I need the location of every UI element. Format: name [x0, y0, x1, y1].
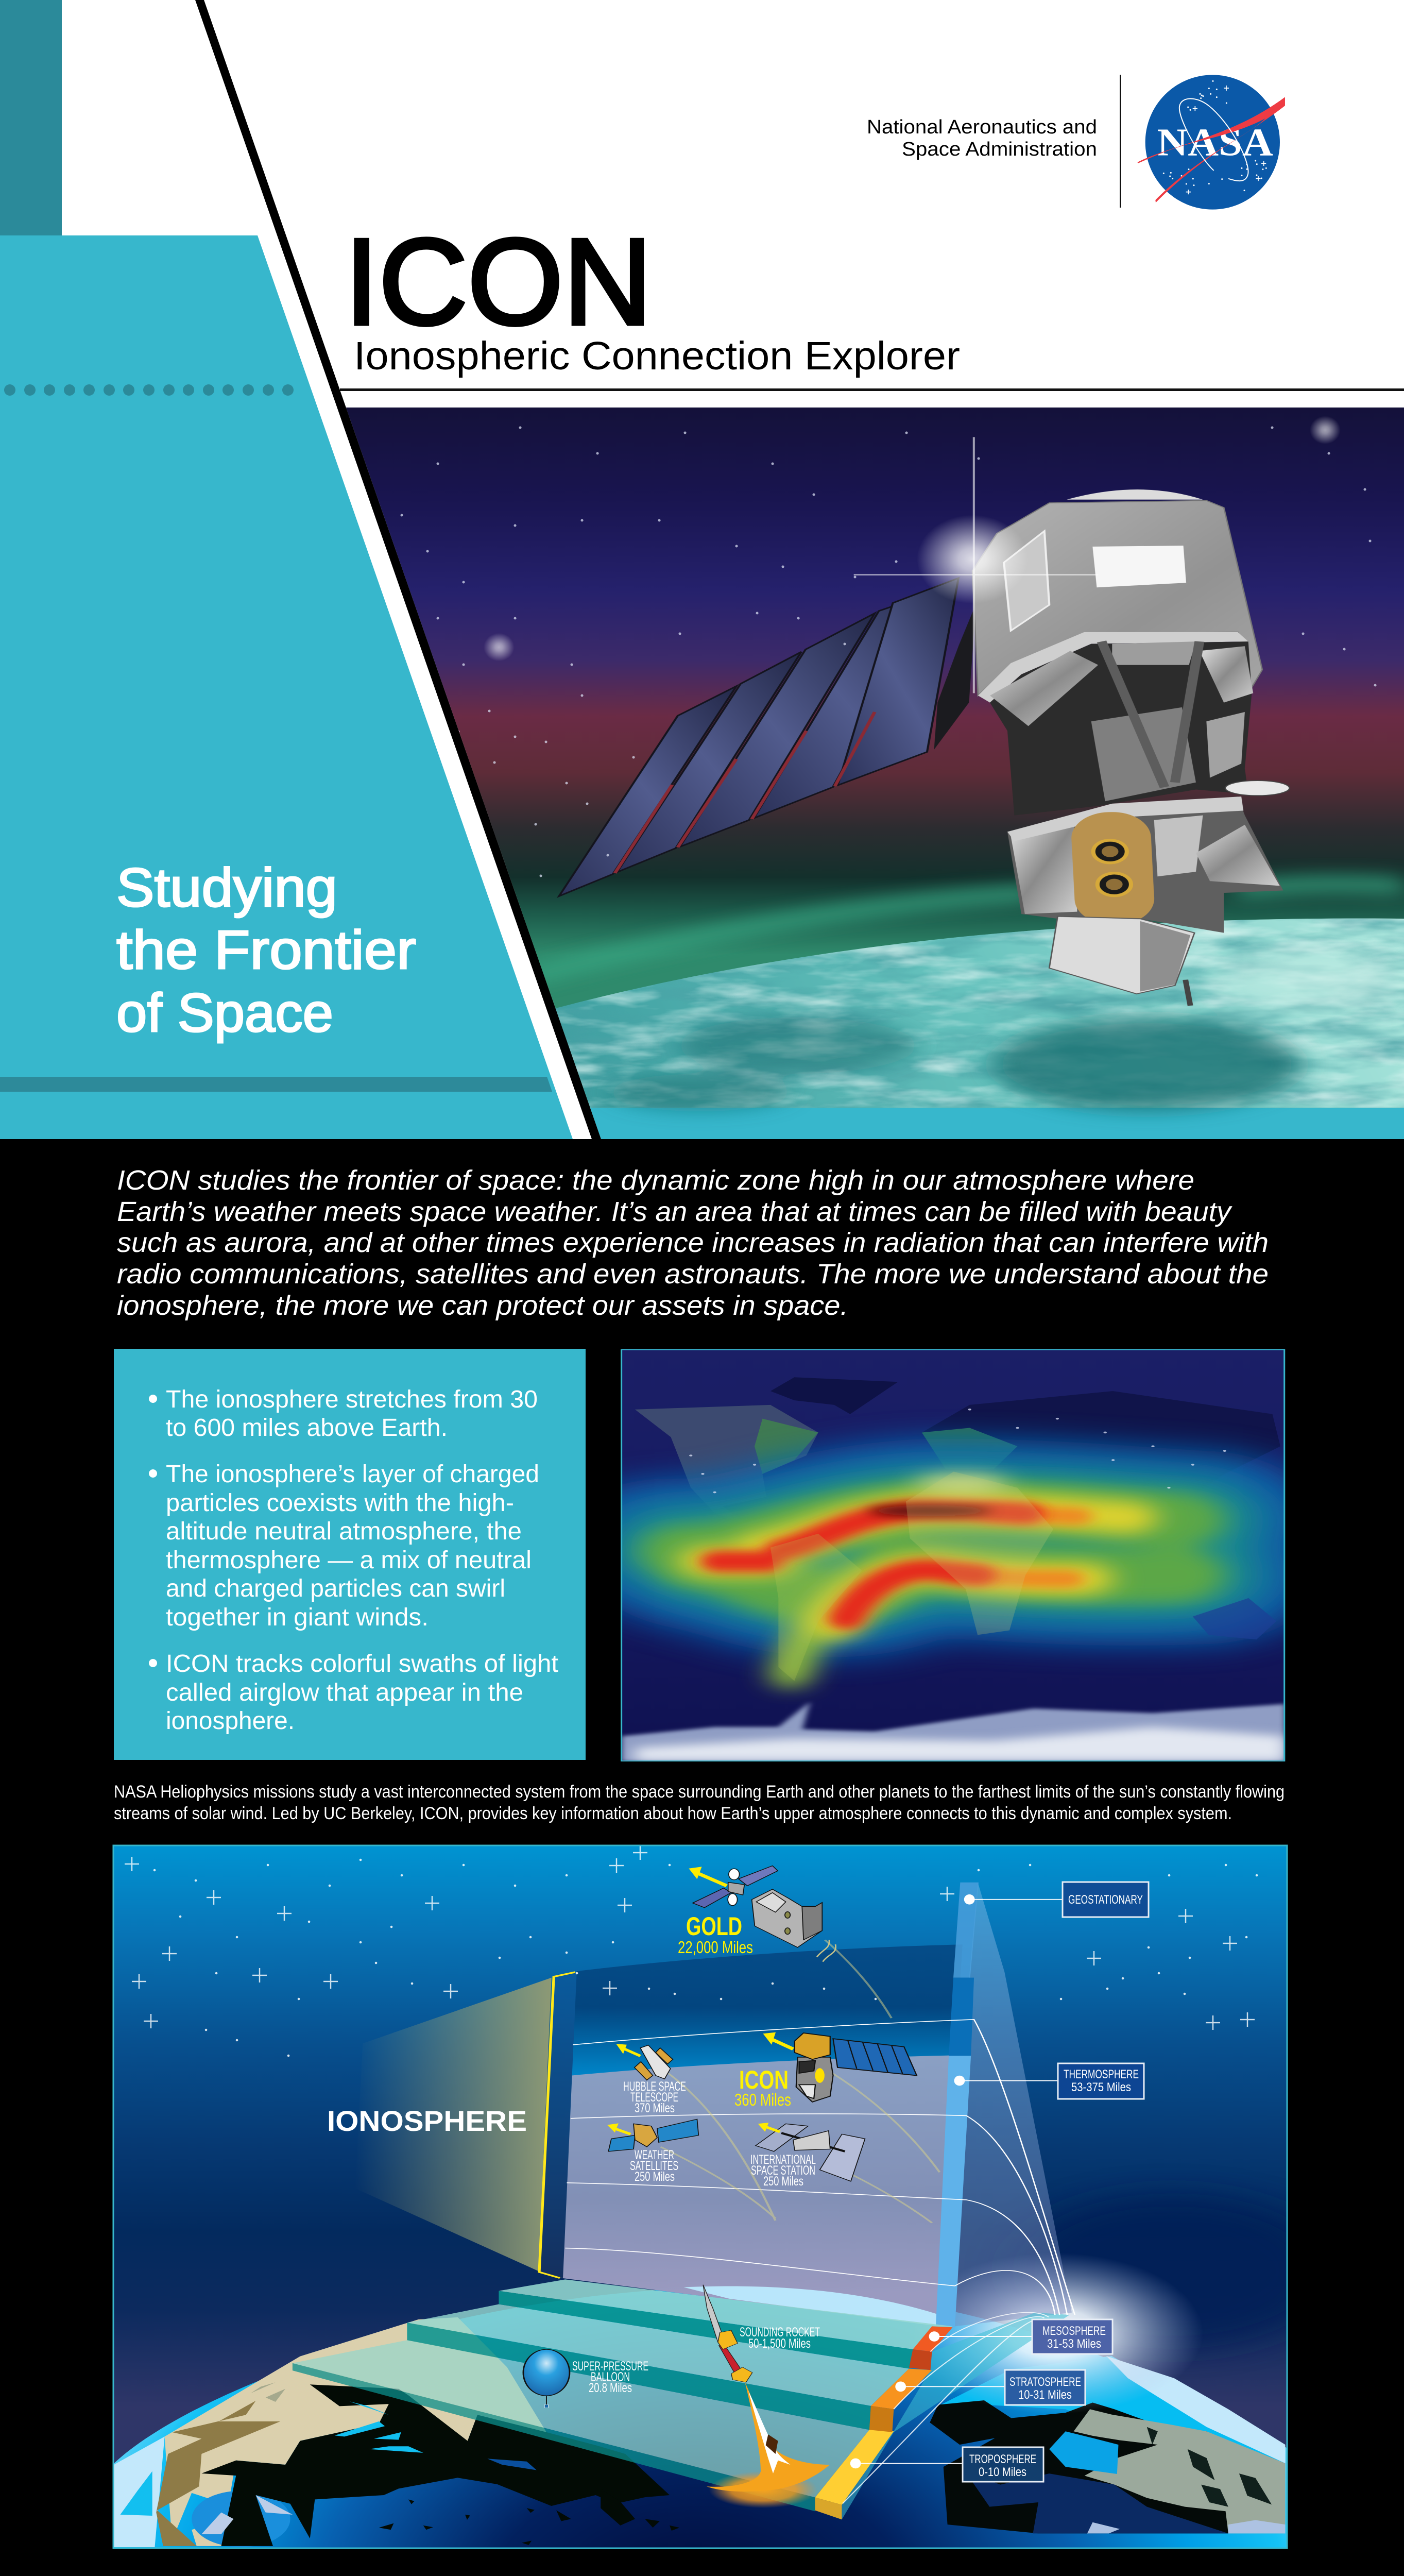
ice edge: [114, 2436, 165, 2547]
heliophysics note: streams of solar wind. Led by UC Berkeley, ICON, provides key information about how Earth’s upper atmosphere connects to this dynamic and complex system.: [114, 1804, 1232, 1823]
intro paragraph: such as aurora, and at other times experience increases in radiation that can interfere with: [117, 1227, 1269, 1258]
panel heading: Studying the Frontier of Space: the Frontier: [116, 920, 416, 980]
layer dots: [850, 1894, 975, 2468]
label: balloon: 20.8 Miles: [589, 2381, 632, 2395]
blue altitude column: [953, 1883, 979, 1978]
layer 2 edge: [407, 2323, 871, 2430]
intro paragraph: ionosphere, the more we can protect our assets in space.: [117, 1290, 848, 1321]
diagram border: [113, 1845, 1287, 2548]
rule under title: [340, 388, 1404, 391]
cyan lakes: [335, 2401, 423, 2453]
earth: [539, 919, 1404, 1108]
layer 1 surface: [499, 2279, 953, 2349]
label: GOLD: 22,000 Miles: [678, 1938, 753, 1957]
label: ISS: [750, 2153, 816, 2189]
label: ICON: 360 Miles: [734, 2090, 791, 2109]
callout: stratosphere: STRATOSPHERE: [1009, 2375, 1081, 2389]
weather satellite: [608, 2119, 698, 2151]
wall lower: [561, 2055, 971, 2326]
dark band on panel: [0, 1077, 552, 1092]
panel: ionosphere bullet points: particles coexists with the high-: [166, 1489, 514, 1517]
map ocean: [622, 1349, 1285, 1761]
dark teal corner bar: [0, 0, 62, 235]
body lower rim: [978, 632, 1248, 703]
dotted row on panel: [4, 384, 294, 396]
super-pressure balloon: [523, 2349, 570, 2408]
subtitle: Ionospheric Connection Explorer: [354, 334, 960, 378]
callout: thermosphere: [1058, 2063, 1144, 2099]
wall side strip: [539, 1972, 577, 2278]
callout leaders: [855, 1900, 1063, 2463]
callout: troposphere: TROPOSPHERE: [969, 2452, 1036, 2466]
distant stars glow: [1310, 416, 1341, 444]
ionosphere cone: [355, 1978, 552, 2271]
wall upper: [569, 1944, 963, 2078]
panel heading: Studying the Frontier of Space: Studying: [116, 857, 337, 918]
callout: stratosphere: [1005, 2370, 1085, 2405]
right continents: [930, 2356, 1285, 2533]
small stars: [155, 1860, 1257, 2056]
blue bay in land: [487, 2459, 537, 2470]
heliophysics note: [114, 1782, 1285, 1823]
callout: geostationary: GEOSTATIONARY: [1068, 1893, 1143, 1907]
cyan coast: [120, 2471, 152, 2516]
label: Hubble: TELESCOPE: [630, 2090, 678, 2105]
header divider: [1120, 75, 1121, 208]
array hinge seams: [615, 712, 875, 873]
panel: ionosphere bullet points: The ionosphere’s layer of charged: [166, 1461, 539, 1488]
hero panel: ICON spacecraft above Earth: [346, 407, 1404, 1139]
label: weather satellites: [630, 2148, 678, 2184]
blue inlet: [192, 2491, 290, 2547]
layer 3 edge: [293, 2363, 815, 2511]
north america: [635, 1405, 818, 1524]
label: sounding rocket: 50-1,500 Miles: [748, 2336, 811, 2351]
header white area: [0, 0, 1404, 1139]
diagram sky: [113, 1845, 1287, 2548]
label: ICON: [734, 2065, 791, 2109]
diagonal black rule: [195, 0, 601, 1139]
layer 2 surface: [407, 2304, 909, 2406]
stratosphere block: [871, 2369, 932, 2409]
panel: ionosphere bullet points: to 600 miles above Earth.: [166, 1414, 448, 1442]
horizon glow: [905, 2253, 1203, 2414]
scattered islands: [379, 2488, 679, 2545]
label: weather satellites: SATELLITES: [630, 2159, 678, 2173]
blue bay: [1049, 2431, 1118, 2474]
white radiator: [1092, 546, 1186, 587]
atmosphere layers diagram: [113, 1845, 1333, 2548]
cyan title panel: [0, 235, 573, 1139]
green glow: [687, 1508, 1177, 1597]
africa: [906, 1471, 1053, 1635]
pale patch: [251, 2382, 285, 2402]
star flare: [917, 515, 1029, 604]
cyan strip under image: [590, 1108, 1404, 1139]
agency name: National Aeronautics and: [867, 116, 1097, 138]
earth globe: [113, 2287, 1287, 2548]
callout: troposphere: 0-10 Miles: [979, 2465, 1026, 2479]
layer 1 edge: [499, 2291, 913, 2369]
map border: [622, 1350, 1285, 1761]
panel: ionosphere bullet points: altitude neutral atmosphere, the: [166, 1518, 522, 1545]
ICON arrow: [769, 2038, 793, 2049]
sounding rocket: [703, 2285, 830, 2508]
peak intensity: [868, 1505, 992, 1516]
cyan ocean: [940, 2356, 1285, 2511]
panel heading: Studying the Frontier of Space: of Space: [116, 982, 333, 1043]
weather satellite arrow: [614, 2128, 630, 2134]
panel: ionosphere bullet points: thermosphere — a mix of neutral: [166, 1547, 532, 1574]
label: balloon: BALLOON: [591, 2370, 630, 2384]
grey land: [1074, 2409, 1285, 2533]
sahara highlight: [915, 1474, 1008, 1493]
label: IONOSPHERE: IONOSPHERE: [327, 2105, 527, 2137]
intro paragraph: ICON studies the frontier of space: the dynamic zone high in our atmosphere where: [117, 1165, 1194, 1196]
pale limb band: [1106, 2356, 1285, 2463]
outer blue glow: [671, 1508, 1201, 1588]
yellow bracket: [539, 1972, 575, 2278]
agency name: Space Administration: [902, 139, 1097, 160]
left continents: [114, 2317, 679, 2547]
black land: [201, 2384, 670, 2546]
side window: [1004, 531, 1049, 631]
spacecraft icons: [607, 1866, 917, 2181]
orbit break mark: [817, 1940, 836, 1962]
altitude boundary curves: [565, 2020, 1075, 2503]
instrument deck: [1007, 796, 1283, 933]
callout: thermosphere: 53-375 Miles: [1071, 2080, 1131, 2094]
label: sounding rocket: SOUNDING ROCKET: [740, 2325, 820, 2340]
label: ISS: 250 Miles: [763, 2174, 803, 2189]
International Space Station: [756, 2124, 865, 2181]
spacecraft upper body: [1067, 489, 1203, 500]
ISS arrow: [764, 2126, 780, 2132]
heliophysics note: NASA Heliophysics missions study a vast interconnected system from the space surrounding Earth and other planets to the farthest limits of the sun’s constantly flowing: [114, 1782, 1285, 1802]
earth bright clouds: [539, 919, 1404, 1108]
yellow glow: [707, 1508, 1129, 1623]
label: GOLD: GOLD: [686, 1912, 742, 1941]
label: weather satellites: 250 Miles: [635, 2170, 675, 2184]
ICON spacecraft: [795, 2033, 917, 2102]
polar patch: [1087, 2520, 1285, 2533]
label: Hubble: HUBBLE SPACE: [623, 2079, 686, 2094]
Hubble telescope: [635, 2045, 673, 2080]
eurasia: [922, 1391, 1280, 1506]
black land: [930, 2400, 1228, 2533]
panel: ionosphere bullet points: and charged particles can swirl: [166, 1575, 505, 1602]
panel: ionosphere bullet points: ionosphere.: [166, 1707, 295, 1735]
intro paragraph: Earth’s weather meets space weather. It’s an area that at times can be filled with beauty: [117, 1196, 1232, 1227]
label: balloon: SUPER-PRESSURE: [572, 2359, 648, 2374]
australia: [1193, 1598, 1276, 1639]
NASA logo: NASA: [1157, 121, 1273, 164]
GOLD spacecraft: [693, 1866, 822, 1947]
hero stars: [402, 428, 1375, 876]
label: GOLD: [678, 1912, 753, 1957]
gold aperture plate: [1070, 811, 1156, 926]
GOLD arrow: [698, 1874, 727, 1886]
troposphere block: [815, 2430, 894, 2505]
orange fade: [962, 1513, 1077, 1579]
callout: mesosphere: [1032, 2319, 1112, 2354]
navy sea: [965, 2471, 1228, 2533]
title: ICON: ICON: [345, 214, 652, 350]
greenland: [771, 1377, 898, 1414]
label: Hubble: 370 Miles: [635, 2101, 675, 2115]
panel: ionosphere bullet points: [114, 1349, 586, 1760]
label: Hubble: [623, 2079, 686, 2115]
hero sky: [346, 407, 1404, 1108]
layer 3 surface: [293, 2340, 869, 2498]
tan land: [165, 2317, 546, 2546]
panel: ionosphere bullet points: called airglow that appear in the: [166, 1679, 523, 1706]
label: ISS: SPACE STATION: [751, 2163, 815, 2178]
panel heading: Studying the Frontier of Space: [116, 857, 416, 1043]
callout: mesosphere: 31-53 Miles: [1047, 2337, 1101, 2351]
panel: ionosphere bullet points: The ionosphere stretches from 30: [166, 1386, 538, 1413]
europe: [922, 1428, 1017, 1469]
diagram stars: [125, 1845, 1255, 2030]
earth top over wall: [683, 2286, 939, 2326]
callout: thermosphere: THERMOSPHERE: [1064, 2067, 1139, 2081]
callout: geostationary: [1063, 1882, 1149, 1917]
brown land: [156, 2401, 280, 2546]
array yoke: [934, 604, 976, 750]
teal glow: [683, 1508, 1189, 1588]
green airglow: [525, 884, 1404, 977]
antarctica: [622, 1702, 1285, 1761]
blue wedge beside blocks: [842, 2313, 1070, 2519]
panel: ionosphere bullet points: together in giant winds.: [166, 1604, 429, 1631]
city lights: [691, 1410, 1225, 1493]
red band: [718, 1510, 1025, 1619]
earth shading: [609, 952, 1398, 1111]
orbit trails: [661, 1940, 939, 2223]
solar array: [559, 578, 958, 896]
label: ICON: ICON: [739, 2065, 789, 2094]
callout: troposphere: [963, 2447, 1043, 2482]
silver base plate: [1049, 917, 1194, 994]
balloon and rocket: [523, 2285, 830, 2508]
Hubble arrow: [623, 2048, 640, 2056]
southern cone glow: [791, 1603, 842, 1676]
right sky darkening: [1012, 2193, 1333, 2349]
mesosphere block: [913, 2326, 953, 2352]
earth cloud texture: [775, 918, 1404, 1108]
pale islands: [201, 2495, 293, 2534]
airglow world map: [622, 1349, 1285, 1761]
spacecraft truss section: [990, 641, 1252, 816]
side latch: [1225, 781, 1290, 795]
label: sounding rocket: [740, 2325, 820, 2351]
eastern north america: [755, 1419, 818, 1474]
intro paragraph: [117, 1165, 1269, 1321]
label: ISS: INTERNATIONAL: [750, 2153, 816, 2167]
NASA logo: [1137, 75, 1285, 210]
label: weather satellites: WEATHER: [635, 2148, 674, 2162]
callout: stratosphere: 10-31 Miles: [1018, 2388, 1072, 2402]
south america: [771, 1534, 862, 1681]
callout: mesosphere: MESOSPHERE: [1042, 2324, 1106, 2338]
right translucent fan: [937, 1883, 1072, 2326]
panel: ionosphere bullet points: ICON tracks colorful swaths of light: [166, 1650, 558, 1677]
label: balloon: [572, 2359, 648, 2395]
intro paragraph: radio communications, satellites and even astronauts. The more we understand about the: [117, 1259, 1269, 1290]
agency name: [867, 116, 1097, 160]
land mottling: [1147, 2427, 1272, 2507]
